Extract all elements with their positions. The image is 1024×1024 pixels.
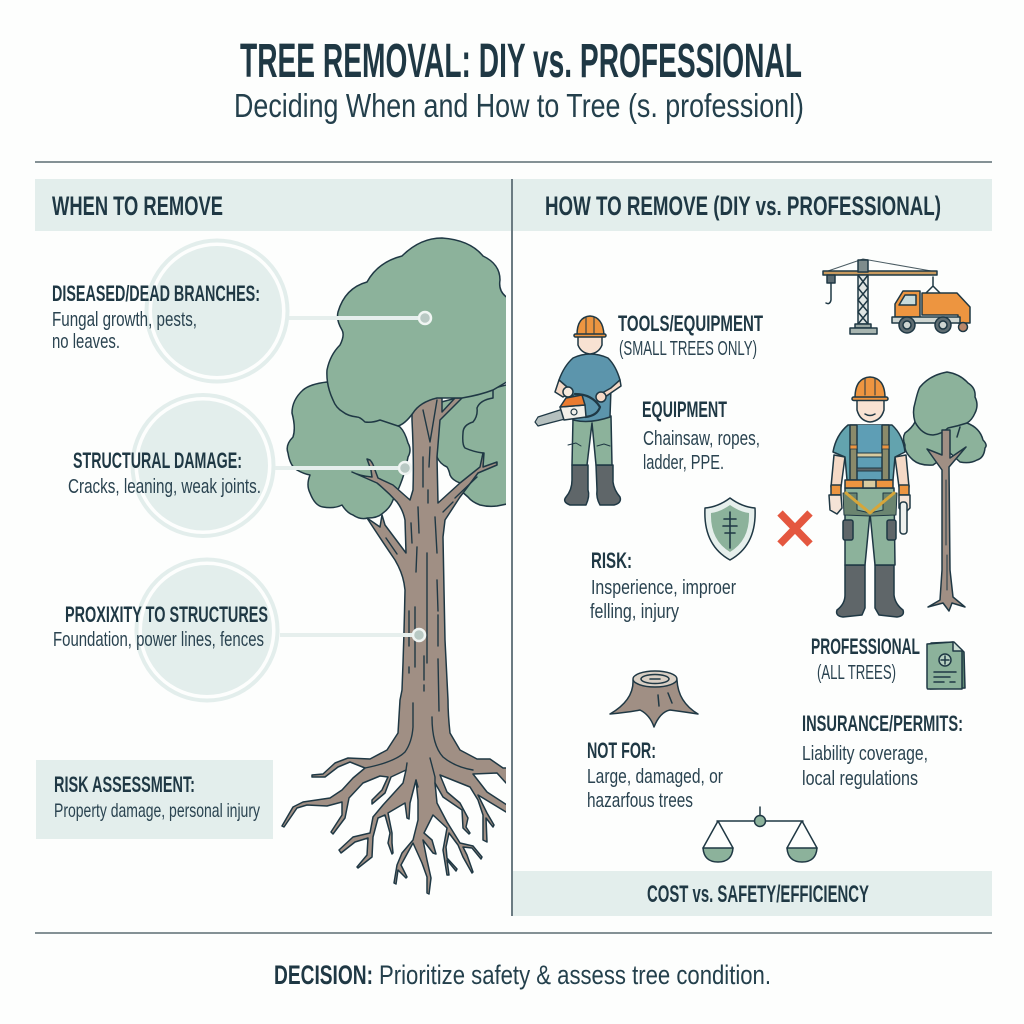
- tree illustration: [282, 238, 512, 894]
- top canopy: [327, 238, 510, 426]
- text: proximity to structures: PROXIXITY TO STRUCTURES: [65, 602, 268, 627]
- connector: proximity: [280, 629, 425, 641]
- back right canopy: [438, 384, 506, 508]
- icon: safety shield: [705, 498, 755, 560]
- text: diseased branches: [52, 281, 260, 353]
- highlight circle: proximity: [136, 560, 278, 700]
- text: not for: Large, damaged, or: [587, 765, 723, 788]
- text: diseased branches: DISEASED/DEAD BRANCHES:: [52, 281, 260, 306]
- text: tools and equipment: [618, 311, 763, 360]
- text: insurance and permits: Liability coverage,: [802, 742, 928, 765]
- icon: DIY worker with chainsaw: [535, 316, 621, 505]
- left canopy: [287, 382, 410, 519]
- icon: balance scales: [703, 807, 817, 862]
- icon: red cross: [780, 513, 810, 544]
- bark lines: [365, 400, 477, 787]
- highlight circle: diseased branches: [146, 240, 288, 382]
- text: risk: felling, injury: [590, 600, 680, 623]
- banner: cost vs safety: COST vs. SAFETY/EFFICIENCY: [647, 881, 869, 908]
- text: diseased branches: Fungal growth, pests,: [52, 308, 197, 331]
- text: proximity to structures: Foundation, power lines, fences: [53, 628, 264, 651]
- text: equipment: Chainsaw, ropes,: [643, 427, 760, 450]
- text: risk: [590, 548, 736, 623]
- panel: when to remove header: WHEN TO REMOVE: [52, 191, 223, 221]
- connector: structural damage: [275, 462, 411, 474]
- text: structural damage: STRUCTURAL DAMAGE:: [73, 448, 242, 473]
- text: equipment: [642, 397, 760, 474]
- text: tools and equipment: (SMALL TREES ONLY): [619, 337, 757, 360]
- subtitle: Deciding When and How to Tree (s. professionl): [234, 87, 804, 124]
- callout: risk assessment: RISK ASSESSMENT:: [54, 772, 195, 797]
- text: structural damage: Cracks, leaning, weak joints.: [68, 475, 261, 498]
- text: insurance and permits: [802, 711, 963, 790]
- text: proximity to structures: [53, 602, 268, 651]
- icon: small tree: [904, 372, 986, 611]
- icon: permit document: [927, 642, 965, 689]
- text: tools and equipment: TOOLS/EQUIPMENT: [618, 311, 763, 336]
- connector: diseased branches: [289, 312, 431, 324]
- banner: cost vs safety: [513, 871, 992, 916]
- text: professional: [811, 634, 920, 684]
- highlight circle: structural damage: [132, 395, 274, 536]
- text: insurance and permits: local regulations: [802, 767, 918, 790]
- icon: professional worker in harness: [829, 377, 910, 617]
- icon: tree stump: [610, 671, 698, 727]
- decision statement: [274, 960, 771, 990]
- decision statement: DECISION:: [274, 960, 373, 990]
- right lobe outline: [463, 382, 507, 453]
- text: equipment: EQUIPMENT: [642, 397, 727, 422]
- panel: when to remove header: [35, 179, 511, 231]
- text: professional: (ALL TREES): [817, 661, 896, 684]
- icon: crane: [823, 259, 937, 334]
- text: not for: hazarfous trees: [587, 789, 693, 812]
- text: professional: PROFESSIONAL: [811, 634, 920, 659]
- panel: how to remove header: [513, 179, 992, 231]
- icon: truck: [892, 277, 970, 333]
- callout: risk assessment: Property damage, personal injury: [54, 800, 260, 822]
- callout: risk assessment: [36, 760, 273, 839]
- text: structural damage: [68, 448, 261, 498]
- text: risk: RISK:: [591, 548, 632, 573]
- trunk, branches and roots: [282, 395, 512, 894]
- text: risk: Insperience, improer: [591, 576, 736, 599]
- text: equipment: ladder, PPE.: [643, 451, 724, 474]
- text: not for: [587, 738, 723, 812]
- decision statement: Prioritize safety & assess tree condition.: [379, 960, 771, 990]
- text: not for: NOT FOR:: [587, 738, 656, 763]
- text: diseased branches: no leaves.: [52, 330, 120, 353]
